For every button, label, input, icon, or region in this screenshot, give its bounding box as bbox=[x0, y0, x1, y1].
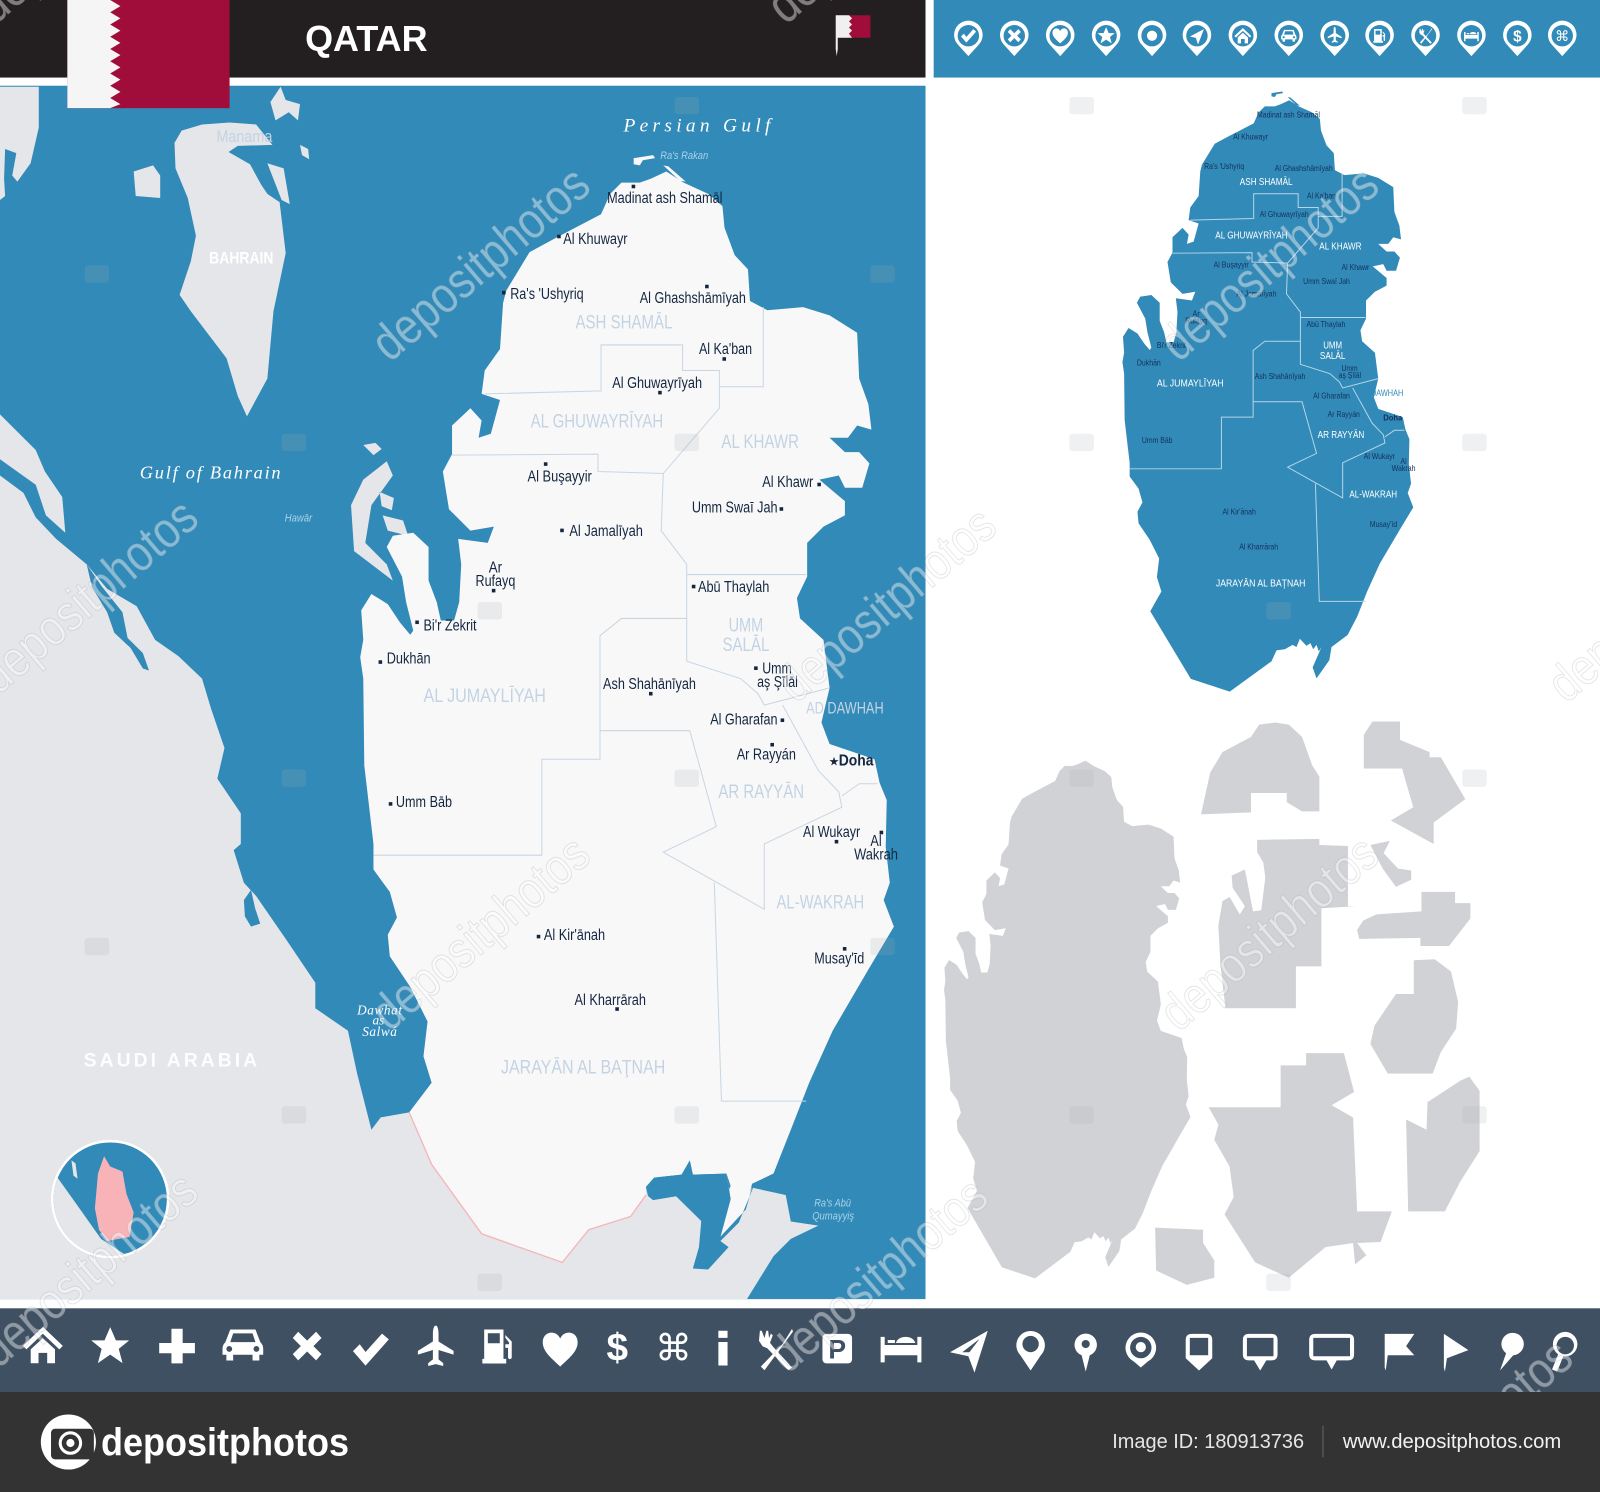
pin: command bbox=[1548, 21, 1577, 56]
inset locator globe bbox=[51, 1140, 170, 1258]
region labels: AR RAYYĀN bbox=[718, 780, 804, 803]
city labels: Rufayq bbox=[476, 573, 515, 590]
municipality borders bbox=[1130, 173, 1404, 601]
region labels: ASH SHAMĀL bbox=[576, 311, 673, 334]
icon: info bbox=[718, 1331, 728, 1365]
icon: star bbox=[91, 1327, 129, 1363]
sea labels: Ra's Rakan bbox=[660, 150, 708, 162]
pin: dollar: $ bbox=[1513, 28, 1522, 45]
city labels: Al Khuwayr bbox=[563, 231, 628, 248]
panel: grey silhouettes bbox=[944, 722, 1480, 1285]
Bahrain islands bbox=[134, 87, 309, 204]
icon bar bbox=[0, 1308, 1600, 1392]
land: Saudi Arabia bbox=[0, 476, 818, 1299]
city labels: aş Şīlāl bbox=[1339, 370, 1361, 380]
region labels: JARAYĀN AL BAŢNAH bbox=[501, 1056, 665, 1079]
pin: heart bbox=[1046, 21, 1074, 56]
city labels: Umm Bāb bbox=[1142, 435, 1173, 445]
city labels: Musay'īd bbox=[814, 950, 864, 967]
municipality borders bbox=[373, 307, 878, 1101]
silhouette: Al Daayen bbox=[1370, 959, 1458, 1074]
city labels: Dukhān bbox=[1137, 357, 1161, 367]
city labels: Al Kharrārah bbox=[1239, 542, 1278, 552]
icon: small flag on pole bbox=[836, 15, 870, 56]
icon: command: ⌘ bbox=[655, 1326, 692, 1369]
city labels: Rufayq bbox=[1185, 316, 1207, 326]
icon: parking: P bbox=[828, 1334, 846, 1364]
region labels: AD DAWHAH bbox=[806, 699, 884, 717]
camera watermarks bbox=[85, 97, 1487, 1291]
city labels: Al bbox=[1400, 456, 1407, 466]
city labels: Dukhān bbox=[387, 650, 431, 667]
region labels bbox=[1157, 176, 1403, 590]
city labels: Abū Thaylah bbox=[1307, 319, 1346, 329]
icon: location pin bbox=[1016, 1331, 1045, 1371]
pin: restaurant bbox=[1411, 21, 1440, 56]
icon: bed bbox=[881, 1337, 921, 1362]
pin: cross bbox=[1000, 21, 1029, 56]
pin: dollar bbox=[1503, 21, 1532, 56]
silhouette: Ash Shamal bbox=[1201, 723, 1319, 814]
inlets in Saudi coast bbox=[87, 564, 260, 927]
city labels: Al Jamalīyah bbox=[1236, 289, 1277, 299]
pin: dot bbox=[1138, 21, 1166, 56]
silhouette: Umm Salal bbox=[1357, 892, 1470, 946]
pin: arrow bbox=[1183, 21, 1211, 56]
footer bbox=[0, 1392, 1600, 1492]
logo: depositphotos bbox=[41, 1414, 349, 1470]
panel: main map bbox=[0, 86, 926, 1299]
city labels: Al Ghashshāmīyah bbox=[640, 290, 746, 307]
city labels bbox=[1137, 109, 1416, 552]
region labels: AL GHUWAYRĪYAH bbox=[531, 410, 663, 433]
border with Saudi Arabia bbox=[409, 1112, 646, 1262]
country labels: Manama bbox=[216, 128, 273, 146]
city labels: Al Wukayr bbox=[803, 824, 860, 841]
land: Qatar bbox=[360, 171, 894, 1262]
flag of Qatar bbox=[67, 0, 230, 108]
icon: home bbox=[23, 1327, 63, 1363]
silhouette: Jarayan al Batnah bbox=[1209, 1053, 1392, 1278]
silhouette: Al Khawr east bbox=[1364, 722, 1465, 844]
region labels: SALĀL bbox=[1320, 350, 1346, 362]
watermarks: depositphotos bbox=[360, 155, 600, 372]
Hawar islands bbox=[351, 443, 408, 581]
logo wordmark: depositphotos bbox=[101, 1421, 349, 1464]
icon: plane bbox=[418, 1326, 454, 1366]
region labels: AR RAYYĀN bbox=[1318, 429, 1364, 441]
icon: speech bubble bbox=[1243, 1334, 1278, 1371]
pin: home bbox=[1229, 21, 1257, 56]
city labels: Madinat ash Shamāl bbox=[1257, 109, 1320, 119]
icon: flag bbox=[1385, 1334, 1414, 1371]
pin: bed bbox=[1457, 21, 1486, 56]
city labels: Al Ka'ban bbox=[699, 341, 752, 358]
icon: wide speech bubble bbox=[1309, 1334, 1354, 1370]
city labels: Ra's 'Ushyriq bbox=[510, 286, 584, 303]
country labels bbox=[84, 128, 273, 1071]
icon: parking bbox=[822, 1334, 852, 1364]
region labels: AL-WAKRAH bbox=[1349, 488, 1397, 500]
watermarks: depositphotos bbox=[758, 1166, 998, 1383]
icon: car bbox=[222, 1330, 263, 1361]
sea labels: Hawār bbox=[285, 512, 313, 524]
sea labels: Dawhat bbox=[356, 1002, 402, 1017]
southern inlet bbox=[646, 1160, 788, 1270]
sea labels: Persian Gulf bbox=[622, 116, 773, 137]
country labels: SAUDI ARABIA bbox=[84, 1049, 257, 1071]
icon: cross bbox=[293, 1332, 322, 1360]
sea background bbox=[0, 86, 926, 1299]
city labels: Ash Shahānīyah bbox=[1255, 371, 1306, 381]
city labels: Bi'r Zekrit bbox=[423, 618, 477, 635]
city labels: Wakrah bbox=[1392, 463, 1416, 473]
city labels: Al Ghuwayrīyah bbox=[612, 375, 702, 392]
silhouette: Al Jumayliyah bbox=[1218, 839, 1356, 1008]
icon: pennant bbox=[1444, 1334, 1468, 1372]
city labels: Al Kir'ānah bbox=[1223, 507, 1256, 516]
pin icons row bbox=[954, 21, 1577, 56]
city labels: Umm Bāb bbox=[396, 794, 452, 811]
city labels: Abū Thaylah bbox=[698, 579, 769, 596]
region labels: JARAYĀN AL BAŢNAH bbox=[1216, 578, 1305, 590]
region labels: UMM bbox=[1323, 339, 1342, 351]
watermarks: depositphotos bbox=[1149, 824, 1389, 1041]
city labels: Musay'īd bbox=[1370, 519, 1397, 529]
city labels: Al Khawr bbox=[1342, 262, 1370, 272]
icon: square pin bbox=[1186, 1334, 1212, 1371]
silhouette: Ad Dawhah bbox=[1370, 841, 1411, 887]
region labels: AL JUMAYLĪYAH bbox=[1157, 377, 1224, 389]
country labels: BAHRAIN bbox=[209, 249, 273, 267]
city labels: Doha bbox=[839, 752, 874, 769]
icon row bbox=[23, 1326, 1577, 1373]
icon: pushpin bbox=[1500, 1333, 1524, 1371]
icon: restaurant bbox=[759, 1329, 793, 1370]
islet off the north tip bbox=[1271, 91, 1300, 106]
city labels: Al bbox=[870, 833, 882, 850]
grey national silhouette bbox=[944, 761, 1191, 1278]
icon: navigation arrow bbox=[950, 1331, 988, 1373]
icon: needle pin bbox=[1074, 1334, 1097, 1372]
icon: heart bbox=[543, 1333, 578, 1367]
city labels: ★ bbox=[829, 754, 840, 768]
city labels: Umm Swaī Jah bbox=[692, 499, 778, 516]
icon: magnifier bbox=[1552, 1332, 1577, 1372]
land: gulf coast peninsula bbox=[0, 414, 65, 533]
pin: star bbox=[1092, 21, 1120, 56]
pin: command: ⌘ bbox=[1555, 29, 1569, 45]
region labels bbox=[423, 311, 884, 1079]
city labels: Wakrah bbox=[854, 846, 898, 863]
header bar bbox=[0, 0, 926, 78]
city markers bbox=[379, 185, 883, 1011]
sea labels: Gulf of Bahrain bbox=[140, 463, 281, 483]
pin strip background bbox=[934, 0, 1600, 78]
title: QATAR bbox=[305, 19, 428, 59]
city labels: Al Kir'ānah bbox=[544, 927, 605, 944]
sea labels: Salwá bbox=[362, 1024, 397, 1039]
city labels: Ar bbox=[1193, 308, 1200, 318]
watermarks: depositphotos bbox=[360, 824, 600, 1041]
pin: fuel bbox=[1365, 21, 1394, 56]
region labels: ASH SHAMĀL bbox=[1240, 176, 1293, 188]
islet: Ras Rakan bbox=[634, 155, 686, 182]
city labels: Al Buşayyir bbox=[1214, 260, 1249, 269]
sea labels: as bbox=[372, 1013, 384, 1028]
blue Qatar shape bbox=[1122, 100, 1413, 692]
region labels: AL-WAKRAH bbox=[777, 891, 864, 913]
region labels: DAWHAH bbox=[1371, 388, 1403, 398]
city labels: Madinat ash Shamāl bbox=[607, 190, 722, 207]
city labels: Al Gharafan bbox=[1313, 390, 1350, 400]
website: www.depositphotos.com bbox=[1342, 1431, 1561, 1453]
city labels: Al Jamalīyah bbox=[569, 523, 643, 540]
pin: car bbox=[1274, 21, 1303, 56]
city labels: Doha bbox=[1383, 412, 1403, 422]
city labels: Al Ghashshāmīyah bbox=[1275, 163, 1333, 173]
icon: target pin bbox=[1126, 1333, 1156, 1367]
icon: check bbox=[353, 1334, 389, 1366]
region labels: AL KHAWR bbox=[1319, 240, 1362, 252]
sea labels bbox=[140, 116, 854, 1223]
city labels bbox=[387, 190, 898, 1009]
city labels: Al Ghuwayrīyah bbox=[1260, 209, 1309, 219]
sea labels: Ra's Abū bbox=[814, 1197, 852, 1209]
silhouette: Al Wakrah bbox=[1406, 1077, 1480, 1211]
pin: plane bbox=[1320, 21, 1349, 56]
city labels: Umm Swaī Jah bbox=[1303, 276, 1350, 286]
watermarks: depositphotos bbox=[766, 496, 1006, 713]
region labels: UMM bbox=[729, 615, 763, 637]
city labels: Ar Rayyán bbox=[1328, 409, 1360, 419]
panel: blue municipalities map bbox=[1122, 91, 1416, 692]
city labels: Ash Shahānīyah bbox=[603, 676, 696, 693]
sea labels: Qumayyiş bbox=[812, 1211, 854, 1223]
pin: check bbox=[954, 21, 983, 56]
city labels: Ra's 'Ushyriq bbox=[1204, 161, 1245, 171]
city labels: Ar Rayyán bbox=[737, 746, 796, 763]
city labels: Al Gharafan bbox=[710, 712, 778, 729]
city labels: Ar bbox=[489, 560, 502, 577]
region labels: AL JUMAYLĪYAH bbox=[423, 684, 546, 707]
icon: dollar: $ bbox=[607, 1326, 629, 1369]
city labels: Al Buşayyir bbox=[528, 469, 592, 486]
region labels: SALĀL bbox=[722, 633, 770, 656]
city labels: Al Ka'ban bbox=[1307, 191, 1336, 201]
watermarks: depositphotos bbox=[1149, 155, 1389, 372]
city labels: Al Kharrārah bbox=[574, 992, 646, 1009]
city labels: Al Wukayr bbox=[1364, 451, 1395, 461]
land: Bahrain bbox=[174, 122, 286, 416]
icon: fuel pump bbox=[482, 1330, 512, 1364]
land: north-west corner bbox=[0, 87, 39, 200]
city labels: aş Şīlāl bbox=[757, 674, 798, 691]
region labels: AL KHAWR bbox=[721, 431, 799, 453]
logo mark bbox=[41, 1414, 96, 1470]
city labels: Al Khawr bbox=[762, 474, 813, 491]
city labels: Bi'r Zekrit bbox=[1157, 340, 1186, 350]
region labels: AL GHUWAYRĪYAH bbox=[1215, 229, 1288, 241]
city labels: Al Khuwayr bbox=[1233, 131, 1268, 141]
silhouette: Al Rayyan south bbox=[1155, 1228, 1214, 1285]
icon: plus bbox=[159, 1329, 195, 1363]
city labels: Umm bbox=[762, 661, 792, 678]
city labels: Umm bbox=[1342, 363, 1358, 373]
image id: Image ID: 180913736 bbox=[1112, 1431, 1304, 1453]
